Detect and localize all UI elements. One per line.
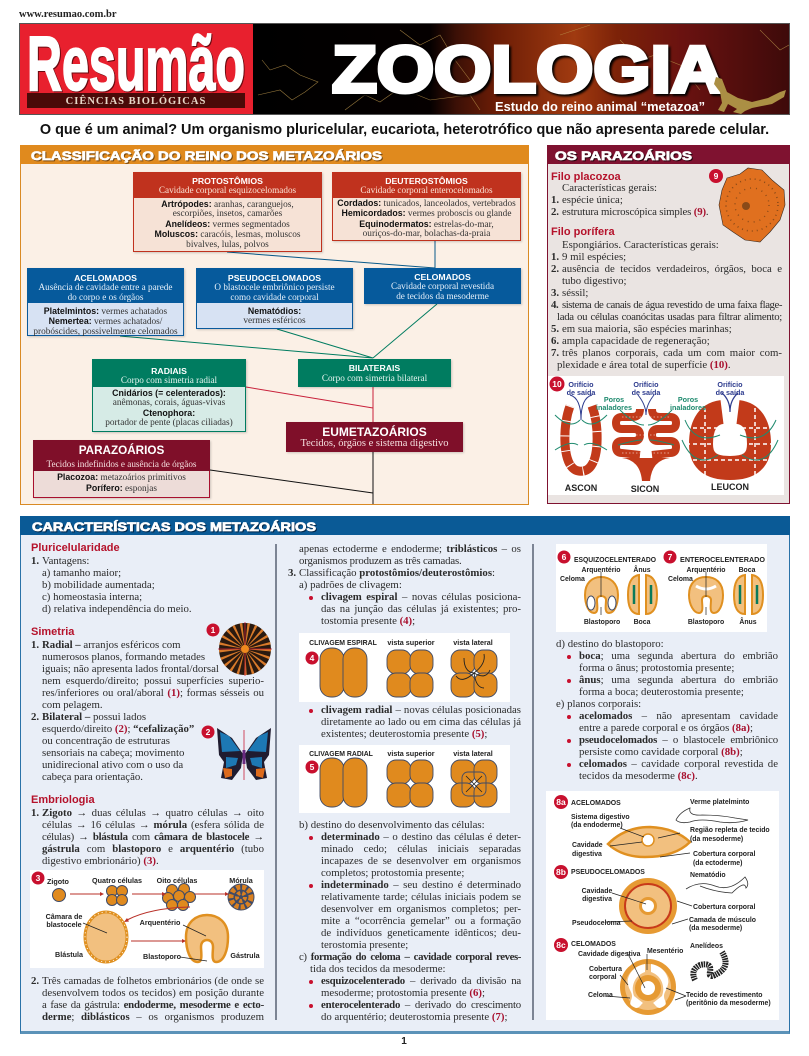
website url: www.resumao.com.br: [19, 9, 117, 20]
body plan labels: Anelídeos: [690, 943, 723, 950]
sicon: [616, 395, 676, 481]
coelomate diagram: [620, 959, 676, 1015]
figure 4: spiral cleavage: [299, 633, 510, 702]
box: pseudocelomados: O blastocele embriônico persiste: [214, 282, 335, 292]
box: eumetazoários: Tecidos, órgãos e sistema digestivo: [300, 438, 449, 449]
box: deuterostômios: Cordados: tunicados, lanceolados, vertebrados: [337, 198, 516, 209]
u-shaped embryos: [585, 575, 763, 614]
text: clivagem radial: diretamente ao lado ou em cima das células já: [321, 716, 521, 728]
text: classificação protostômios: clivagem espiral – novas células posiciona-: [321, 591, 521, 603]
text: classificação protostômios: apenas ectoderme e endoderme; triblásticos – os: [299, 543, 521, 555]
text: destino e celoma: b) destino do desenvolvimento das células:: [299, 819, 485, 831]
text: simetria: numerosos planos, formando metades: [42, 651, 205, 663]
text: classificação protostômios: [288, 543, 521, 627]
text: blastoporo e planos corporais: entre a parede corporal e os órgãos (8a);: [579, 722, 753, 734]
box: radiais: Cnidários (= celenterados):: [112, 388, 226, 398]
body plan labels: Verme platelminto: [690, 799, 749, 806]
sponge labels: Poros: [678, 395, 698, 404]
text: filo porífera: Filo porífera: [551, 226, 615, 238]
body plan labels: Cobertura corporal: [693, 904, 755, 911]
radial labels: vista lateral: [453, 749, 493, 758]
box: celomados: [364, 268, 521, 304]
figure 3: embryology: [30, 870, 264, 968]
text: simetria: unidirecional ativo com o uso da: [42, 759, 183, 771]
box: radiais: Ctenophora:: [143, 408, 195, 418]
badge 9: 9: [714, 171, 719, 181]
text: embriologia: 1.: [31, 807, 39, 819]
text: filo porífera: lada ou células coanócitas usadas para filtrar alimento;: [557, 311, 782, 323]
text: destino e celoma: relativamente tarde; células iniciais podem se: [321, 891, 521, 903]
text: filo porífera: 1.: [551, 251, 559, 263]
text: blastoporo e planos corporais: tecidos da mesoderme (8c).: [579, 770, 698, 782]
zygote to morula: [52, 884, 196, 910]
coelom labels: [560, 557, 766, 626]
embryology labels: Blástula: [55, 950, 84, 959]
pseudocoelomate diagram: [619, 878, 677, 934]
text: filo placozoa: estrutura microscópica simples (9).: [562, 206, 708, 218]
text: simetria: Bilateral – possui lados: [42, 711, 146, 723]
text: simetria: Simetria: [31, 626, 74, 638]
connector lines: [120, 241, 438, 504]
badge 4: [306, 652, 318, 664]
text: classificação protostômios: tostomia presente (4);: [321, 615, 415, 627]
text: destino e celoma: minado cedo; células iniciais separadas: [321, 843, 521, 855]
text: filo placozoa: Filo placozoa: [551, 171, 621, 183]
text: blastoporo e planos corporais: boca; uma segunda abertura do embrião: [579, 650, 778, 662]
box: celomados: de tecidos da mesoderme: [396, 290, 489, 300]
text: filo placozoa: Características gerais:: [562, 182, 657, 194]
text: destino e celoma: desenvolver em organismos completos; per-: [321, 903, 521, 915]
sponge labels: Orifício: [568, 380, 594, 389]
heading: características: CARACTERÍSTICAS DOS METAZOÁRIOS: [32, 519, 316, 534]
badge 8c: [554, 938, 568, 952]
leucon: [682, 393, 778, 478]
figure 8: body plans: [546, 791, 779, 1020]
text: três camadas: [31, 975, 264, 1023]
badge 5: [306, 760, 318, 774]
panel: os parazoários: [547, 145, 790, 504]
text: filo porífera: 7.: [551, 347, 559, 359]
box: eumetazoários: EUMETAZOÁRIOS: [322, 425, 427, 439]
page number: 1: [401, 1036, 407, 1047]
body plan labels: Nematódio: [690, 872, 726, 879]
column dividers: [275, 544, 277, 1020]
coelom labels: Celoma: [668, 576, 693, 583]
box: radiais: RADIAIS: [151, 366, 187, 376]
text: blastoporo e planos corporais: [556, 638, 778, 782]
text: filo porífera: 6.: [551, 335, 559, 347]
coelom labels: Boca: [634, 619, 651, 626]
body plan labels: Cavidade: [582, 888, 612, 895]
box: pseudocelomados: PSEUDOCELOMADOS: [228, 273, 321, 283]
text: destino e celoma: tida dos tecidos da mesoderme:: [310, 963, 446, 975]
figure 6-7: coelom formation: [556, 544, 767, 632]
body plan labels: Cavidade: [572, 842, 603, 849]
text: destino e celoma: mesoderme; protostomia presente (6);: [321, 987, 485, 999]
text: clivagem radial: [309, 704, 521, 740]
text: embriologia: células → 16 células → mórula (esfera sólida de: [42, 819, 264, 831]
body plan labels: digestiva: [572, 851, 602, 858]
embryology labels: Quatro células: [92, 876, 142, 885]
text: pluricelularidade: Vantagens:: [42, 555, 89, 567]
ascon: [555, 395, 607, 471]
box: parazoários: [33, 440, 210, 498]
text: classificação protostômios: Classificação protostômios/deuterostômios:: [299, 567, 495, 579]
text: simetria: 2.: [31, 711, 39, 723]
badge 8c: 8c: [556, 940, 566, 950]
body plan labels: Cobertura corporal: [693, 851, 755, 858]
box: parazoários: Placozoa: metazoários primitivos: [57, 472, 186, 483]
text: classificação protostômios: 3.: [288, 567, 296, 579]
box: protostômios: bivalves, lulas, polvos: [186, 240, 269, 250]
box: deuterostômios: Equinodermatos: estrelas-do-mar,: [359, 219, 494, 230]
body plan labels: Cobertura: [589, 966, 622, 973]
badge 8b: [554, 865, 568, 879]
embryology labels: Zigoto: [47, 877, 70, 886]
body plan labels: CELOMADOS: [571, 941, 616, 948]
text: três camadas: a fase da gástrula: endoderme, mesoderme e ecto-: [42, 999, 264, 1011]
text: filo porífera: Espongiários. Características gerais:: [562, 239, 719, 251]
spiral labels: [309, 638, 493, 647]
coelom labels: Boca: [739, 567, 756, 574]
sponge labels: inaladores: [596, 403, 632, 412]
box: radiais: Corpo com simetria radial: [121, 375, 217, 385]
text: pluricelularidade: d) relativa independência do meio.: [42, 603, 192, 615]
sponge labels: ASCON: [565, 483, 597, 493]
icon: lizard: [714, 77, 786, 114]
box: protostômios: Anelídeos: vermes segmentados: [165, 219, 290, 230]
embryology labels: Gástrula: [230, 951, 261, 960]
badge 6: 6: [562, 552, 567, 562]
logo subtitle: CIÊNCIAS BIOLÓGICAS: [66, 95, 206, 107]
badge 7: 7: [668, 552, 673, 562]
coelom labels: Ânus: [739, 617, 757, 626]
box: acelomados: Ausência de cavidade entre a parede: [39, 282, 172, 292]
panel: características: [20, 516, 790, 1034]
heading: os parazoários: OS PARAZOÁRIOS: [555, 148, 692, 163]
arrows: [70, 894, 225, 941]
text: clivagem radial: clivagem radial – novas células posicionadas: [321, 704, 521, 716]
text: simetria: nem esquerdo/direito; possui superfícies superio-: [42, 675, 264, 687]
nematode: [686, 877, 748, 893]
text: blastoporo e planos corporais: ânus; uma segunda abertura do embrião: [579, 674, 778, 686]
body plan labels: corporal: [589, 974, 617, 981]
box: acelomados: do corpo e os órgãos: [68, 292, 143, 302]
text: pluricelularidade: [31, 542, 192, 615]
text: embriologia: células) → blástula com câmara de blastocele →: [42, 831, 264, 843]
embryology labels: Câmara de: [46, 912, 82, 921]
box: acelomados: Nemertea: vermes achatados/: [49, 316, 162, 327]
figure 1: radial symmetry: [206, 622, 272, 676]
figure 5: radial cleavage: [299, 745, 510, 813]
text: três camadas: derme; diblásticos – os organismos produzem: [42, 1011, 264, 1023]
text: filo placozoa: espécie única;: [562, 194, 623, 206]
box: deuterostômios: [332, 172, 521, 241]
text: simetria: sensoriais na cabeça; movimento: [42, 747, 184, 759]
text: blastoporo e planos corporais: forma o ânus; protostomia presente;: [579, 662, 734, 674]
body plan labels: Camada de músculo: [689, 917, 756, 924]
body plan labels: ACELOMADOS: [571, 800, 621, 807]
box: deuterostômios: DEUTEROSTÔMIOS: [385, 176, 468, 186]
leader lines: [605, 828, 692, 1000]
text: simetria: Radial – arranjos esféricos com: [42, 639, 181, 651]
box: acelomados: [27, 268, 184, 336]
text: destino e celoma: mite a “ocorrência gemelar” ou a formação: [321, 915, 521, 927]
badge 8a: [554, 795, 568, 809]
box: bilaterais: [298, 359, 451, 387]
box: pseudocelomados: [196, 268, 353, 329]
box: pseudocelomados: vermes esféricos: [243, 316, 306, 326]
text: clivagem radial: existentes; deuterostomia presente (5);: [321, 728, 487, 740]
body plan labels: Cavidade digestiva: [578, 951, 641, 958]
text: filo porífera: 4.: [551, 299, 558, 311]
box: radiais: portador de pente (placas ciliadas): [105, 418, 233, 428]
spiral labels: vista superior: [387, 638, 435, 647]
text: filo porífera: três planos corporais, cada um com maior com-: [562, 347, 782, 359]
body plan labels: (da mesoderme): [689, 925, 742, 932]
body plan labels: (da mesoderme): [690, 836, 743, 843]
banner subtitle: Estudo do reino animal “metazoa”: [495, 100, 705, 114]
text: filo porífera: [551, 226, 782, 371]
badge 8a: 8a: [556, 797, 566, 807]
badge 6: [558, 550, 570, 564]
radial labels: CLIVAGEM RADIAL: [309, 751, 373, 758]
badge 10: 10: [552, 379, 562, 389]
text: embriologia: Zigoto → duas células → quatro células → oito: [42, 807, 264, 819]
coelom labels: Arquentério: [581, 567, 621, 574]
text: filo porífera: ausência de tecidos verdadeiros, órgãos, boca e: [562, 263, 782, 275]
body plan labels: Mesentério: [647, 948, 683, 955]
text: simetria: 1.: [31, 639, 39, 651]
flatworm: [676, 808, 748, 823]
badge 1: 1: [211, 625, 216, 635]
text: embriologia: digestivo embrionário) (3).: [42, 855, 159, 867]
badge 8b: 8b: [556, 867, 566, 877]
text: filo porífera: 3.: [551, 287, 559, 299]
badge 3: 3: [36, 873, 41, 883]
text: filo porífera: em sua maioria, são espécies marinhas;: [562, 323, 732, 335]
box: acelomados: Platelmintos: vermes achatados: [44, 306, 167, 317]
box: pseudocelomados: como cavidade corporal: [230, 292, 319, 302]
text: pluricelularidade: c) homeostasia interna;: [42, 591, 142, 603]
text: filo porífera: sistema de canais de água revestido de uma faixa flage-: [562, 299, 782, 311]
box: protostômios: Cavidade corporal esquizocelomados: [159, 185, 296, 195]
box: deuterostômios: Hemicordados: vermes proboscis ou glande: [342, 208, 511, 219]
text: destino e celoma: completos; protostomia presente;: [321, 867, 464, 879]
embryology labels: Arquentério: [140, 918, 181, 927]
body plan labels: Região repleta de tecido: [690, 827, 770, 834]
text: simetria: cabeça para orientação.: [42, 771, 143, 783]
text: filo porífera: 2.: [551, 263, 559, 275]
box: parazoários: Porífero: esponjas: [86, 483, 157, 494]
panel: classificação: [20, 145, 529, 505]
box: protostômios: [133, 172, 322, 252]
body plan labels: PSEUDOCELOMADOS: [571, 869, 645, 876]
text: classificação protostômios: a) padrões de clivagem:: [299, 579, 402, 591]
body plan labels: Tecido de revestimento: [686, 992, 762, 999]
sponge labels: de saída: [632, 388, 661, 397]
body plan labels: digestiva: [582, 896, 612, 903]
badge 3: [32, 872, 44, 884]
box: pseudocelomados: Nematódios:: [248, 306, 301, 316]
text: filo porífera: ampla capacidade de regeneração;: [562, 335, 710, 347]
text: três camadas: Três camadas de folhetos embrionários (de onde se: [42, 975, 264, 987]
text: três camadas: desenvolvem todos os tecidos) em posição durante: [42, 987, 264, 999]
box: eumetazoários: [286, 422, 463, 452]
text: destino e celoma: [299, 819, 521, 1023]
embryology labels: Mórula: [229, 876, 254, 885]
sponge labels: Orifício: [717, 380, 743, 389]
acoelomate diagram: [608, 827, 690, 857]
text: pluricelularidade: b) mobilidade aumentada;: [42, 579, 155, 591]
text: filo porífera: 5.: [551, 323, 559, 335]
sponge labels: Orifício: [633, 380, 659, 389]
sponge labels: de saída: [716, 388, 745, 397]
embryology labels: [46, 876, 261, 961]
coelom labels: ENTEROCELENTERADO: [680, 557, 766, 564]
badge 4: 4: [310, 653, 315, 663]
tagline: O que é um animal? Um organismo pluricelular, eucariota, heterotrófico que não apresenta parede celular.: [40, 122, 769, 138]
text: simetria: esquerdo/direito (2); “cefalização”: [42, 723, 194, 735]
box: bilaterais: Corpo com simetria bilateral: [322, 373, 427, 383]
box: parazoários: Tecidos indefinidos e ausência de órgãos: [47, 459, 196, 469]
box: protostômios: escorpiões, insetos, camarões: [173, 209, 282, 219]
blastula: [85, 912, 127, 962]
text: destino e celoma: indeterminado – seu destino é determinado: [321, 879, 521, 891]
spiral labels: vista lateral: [453, 638, 493, 647]
box: protostômios: Artrópodes: aranhas, caranguejos,: [161, 199, 294, 210]
coelom labels: Blastoporo: [584, 619, 620, 626]
figure 10: sponge body plans: [548, 376, 784, 495]
text: classificação protostômios: organismos produzem as três camadas.: [299, 555, 462, 567]
box: celomados: Cavidade corporal revestida: [391, 281, 494, 291]
box: protostômios: Moluscos: caracóis, lesmas, moluscos: [154, 229, 300, 240]
body plan labels: (da ectoderme): [693, 860, 742, 867]
text: blastoporo e planos corporais: acelomados – não apresentam cavidade: [579, 710, 778, 722]
heading: classificação: CLASSIFICAÇÃO DO REINO DOS METAZOÁRIOS: [31, 148, 382, 163]
spiral labels: CLIVAGEM ESPIRAL: [309, 640, 377, 647]
coelom labels: Ânus: [633, 565, 651, 574]
box: deuterostômios: ouriços-do-mar, bolachas-da-praia: [363, 229, 490, 239]
figure 2: butterfly: [202, 726, 271, 780]
radial labels: [309, 749, 493, 758]
page title: ZOOLOGIA: [332, 32, 724, 106]
sponge labels: [565, 380, 749, 494]
embryology labels: blastocele: [46, 920, 82, 929]
text: embriologia: gástrula com blastoporo e arquentério (tubo: [42, 843, 264, 855]
text: embriologia: Embriologia: [31, 794, 95, 806]
text: destino e celoma: c) formação do celoma – cavidade corporal reves-: [299, 951, 521, 963]
sponge labels: Poros: [604, 395, 624, 404]
box: radiais: anêmonas, corais, águas-vivas: [113, 398, 225, 408]
sponge labels: inaladores: [670, 403, 706, 412]
text: simetria: res/inferiores ou oral/aboral (1); formas sésseis ou: [42, 687, 264, 699]
text: destino e celoma: terostomia presente;: [321, 939, 408, 951]
heading: características: [20, 516, 790, 535]
body plan labels: Celoma: [588, 992, 613, 999]
box: protostômios: PROTOSTÔMIOS: [192, 176, 263, 186]
text: destino e celoma: do arquentério; deuterostomia presente (7);: [321, 1011, 507, 1023]
text: blastoporo e planos corporais: celomados – cavidade corporal revestida de: [579, 758, 778, 770]
body plan labels: [571, 799, 771, 1007]
coelom labels: Blastoporo: [688, 619, 724, 626]
text: filo porífera: séssil;: [562, 287, 588, 299]
text: pluricelularidade: 1.: [31, 555, 39, 567]
text: filo porífera: tubo digestivo;: [562, 275, 626, 287]
box: celomados: CELOMADOS: [414, 272, 471, 282]
heading: classificação: [20, 145, 529, 164]
body plan labels: (da endoderme): [571, 822, 623, 829]
coelom labels: ESQUIZOCELENTERADO: [574, 557, 657, 564]
text: filo placozoa: 2.: [551, 206, 559, 218]
sponge labels: de saída: [567, 388, 596, 397]
sponge labels: SICON: [631, 484, 659, 494]
text: simetria: [31, 626, 264, 783]
text: embriologia: [31, 794, 264, 867]
text: três camadas: 2.: [31, 975, 39, 987]
text: blastoporo e planos corporais: forma a boca; deuterostomia presente;: [579, 686, 744, 698]
coelom labels: Celoma: [560, 576, 585, 583]
text: simetria: iguais; não apresenta lados frontal/dorsal: [42, 663, 219, 675]
badge 5: 5: [310, 762, 315, 772]
body plan labels: Pseudoceloma: [572, 920, 621, 927]
box: parazoários: PARAZOÁRIOS: [79, 444, 164, 457]
text: filo placozoa: 1.: [551, 194, 559, 206]
embryology labels: Oito células: [157, 876, 197, 885]
text: destino e celoma: de indivíduos geneticamente idênticos; deu-: [321, 927, 521, 939]
radial labels: vista superior: [387, 749, 435, 758]
text: destino e celoma: incapazes de se desenvolver em organismos: [321, 855, 521, 867]
text: blastoporo e planos corporais: d) destino do blastoporo:: [556, 638, 664, 650]
box: deuterostômios: Cavidade corporal enterocelomados: [360, 185, 493, 195]
figure 9: placozoa: [709, 168, 786, 242]
sponge labels: LEUCON: [711, 482, 749, 492]
text: destino e celoma: esquizocelenterado – derivado da divisão na: [321, 975, 521, 987]
text: simetria: com pelagem.: [42, 699, 103, 711]
body plan labels: (peritônio da mesoderme): [686, 1000, 771, 1007]
text: destino e celoma: enterocelenterado – derivado do crescimento: [321, 999, 521, 1011]
text: pluricelularidade: Pluricelularidade: [31, 542, 120, 554]
box: bilaterais: BILATERAIS: [349, 363, 400, 373]
annelid: [693, 952, 726, 980]
logo text: Resumão: [27, 21, 245, 107]
text: blastoporo e planos corporais: pseudocelomados – o blastocele embriônico: [579, 734, 778, 746]
box: radiais: [92, 359, 246, 432]
heading: os parazoários: [547, 145, 790, 164]
body plan labels: Sistema digestivo: [571, 814, 630, 821]
coelom labels: Arquentério: [686, 567, 726, 574]
embryology labels: Blastoporo: [143, 952, 182, 961]
text: simetria: ou concentração de estruturas: [42, 735, 170, 747]
text: filo placozoa: [551, 171, 708, 218]
box: acelomados: ACELOMADOS: [74, 273, 137, 283]
gastrula: [186, 915, 228, 962]
text: filo porífera: 9 mil espécies;: [562, 251, 626, 263]
badge 2: 2: [206, 727, 211, 737]
box: acelomados: probóscides, possivelmente celomados: [33, 327, 178, 337]
badge 7: [664, 550, 676, 564]
text: pluricelularidade: a) tamanho maior;: [42, 567, 121, 579]
text: filo porífera: plexidade e área total de superfície (10).: [557, 359, 731, 371]
text: destino e celoma: determinado – o destino das células é deter-: [321, 831, 521, 843]
text: blastoporo e planos corporais: e) planos corporais:: [556, 698, 641, 710]
badge 10: [550, 376, 564, 392]
text: classificação protostômios: das na junção das células já existentes; pro-: [321, 603, 521, 615]
text: blastoporo e planos corporais: persiste como cavidade corporal (8b);: [579, 746, 743, 758]
banner: [19, 21, 790, 115]
